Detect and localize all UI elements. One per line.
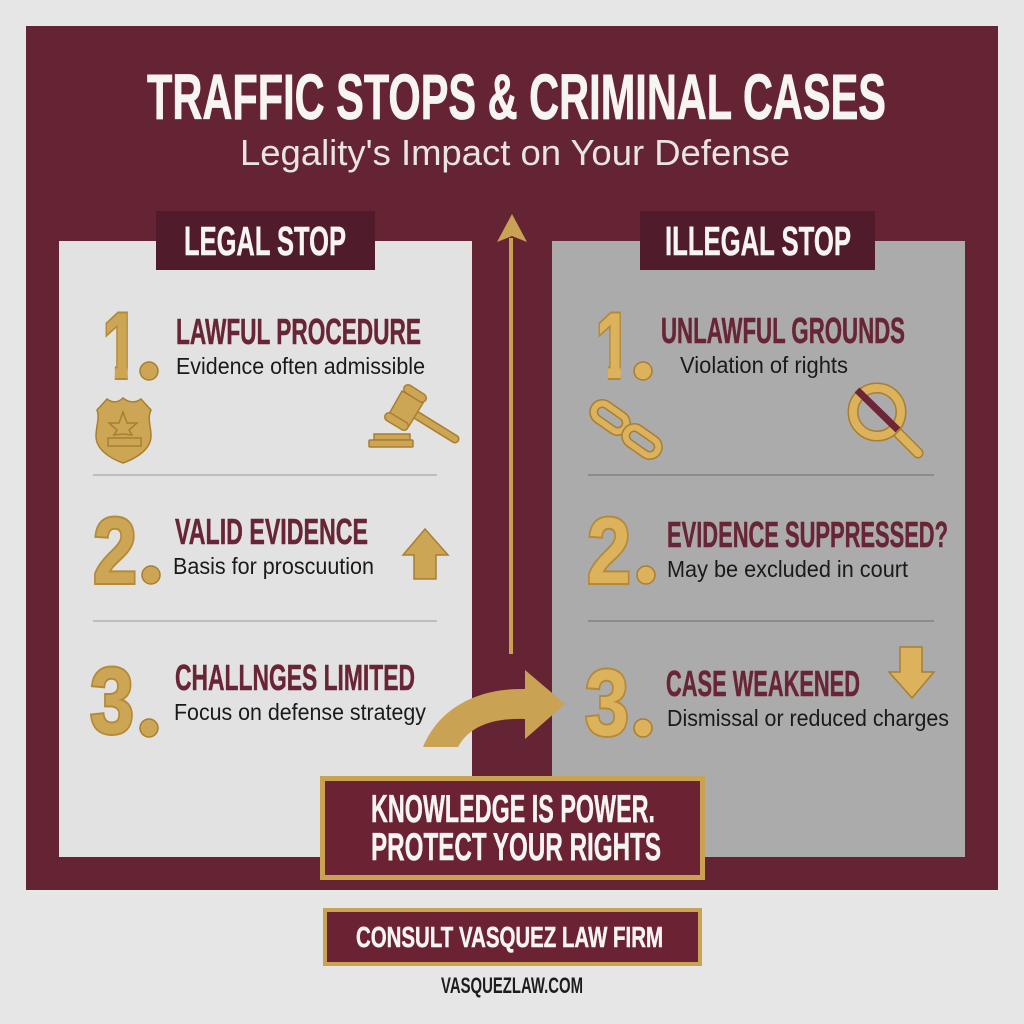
item 3: case weakened	[585, 650, 949, 755]
item 1: lawful procedure: 1	[102, 293, 138, 398]
arrow: vertical up	[497, 214, 527, 654]
subtitle: Legality's Impact on Your Defense	[240, 132, 790, 173]
item 3: case weakened: CASE WEAKENED	[666, 663, 860, 704]
website: VASQUEZLAW.COM	[441, 973, 583, 998]
heading: illegal stop	[640, 211, 875, 270]
icon: broken chain	[590, 400, 662, 459]
arrow: curved legal to illegal	[423, 670, 565, 747]
item 1: unlawful grounds: 1	[596, 293, 632, 398]
item 2: valid evidence: 2	[93, 498, 137, 603]
item 2: evidence suppressed: 2	[587, 498, 631, 603]
call to action box: CONSULT VASQUEZ LAW FIRM	[356, 922, 663, 954]
callout: knowledge is power: KNOWLEDGE IS POWER.	[371, 788, 655, 831]
item 3: challenges limited: 3	[90, 648, 134, 753]
item 2: evidence suppressed	[587, 498, 948, 603]
item 3: challenges limited	[90, 648, 426, 753]
panel: legal stop	[59, 211, 472, 857]
item 3: case weakened: 3	[585, 650, 629, 755]
icon: gavel	[369, 389, 455, 447]
item 1: lawful procedure: LAWFUL PROCEDURE	[176, 311, 421, 352]
callout: knowledge is power: PROTECT YOUR RIGHTS	[371, 826, 661, 869]
icon: down arrow	[889, 647, 934, 698]
heading: illegal stop: ILLEGAL STOP	[665, 218, 851, 264]
callout: knowledge is power	[322, 778, 702, 878]
item 2: valid evidence: Basis for proscuution	[173, 553, 374, 579]
heading: legal stop: LEGAL STOP	[184, 218, 346, 264]
item 2: evidence suppressed: May be excluded in court	[667, 556, 909, 582]
item 1: lawful procedure: Evidence often admissible	[176, 353, 425, 379]
item 3: challenges limited: CHALLNGES LIMITED	[175, 657, 415, 698]
heading: legal stop	[156, 211, 375, 270]
panel: illegal stop	[552, 211, 965, 857]
icon: police badge	[96, 398, 151, 463]
item 3: challenges limited: Focus on defense strategy	[174, 699, 426, 725]
item 1: unlawful grounds	[598, 312, 904, 381]
item 2: valid evidence	[93, 498, 374, 603]
item 2: valid evidence: VALID EVIDENCE	[175, 511, 368, 552]
icon: up arrow	[403, 529, 448, 579]
item 3: case weakened: Dismissal or reduced charges	[667, 705, 949, 731]
call to action box	[325, 910, 700, 964]
item 1: unlawful grounds: Violation of rights	[680, 352, 848, 378]
icon: magnifier with slash	[853, 388, 918, 453]
item 1: lawful procedure	[106, 312, 424, 381]
